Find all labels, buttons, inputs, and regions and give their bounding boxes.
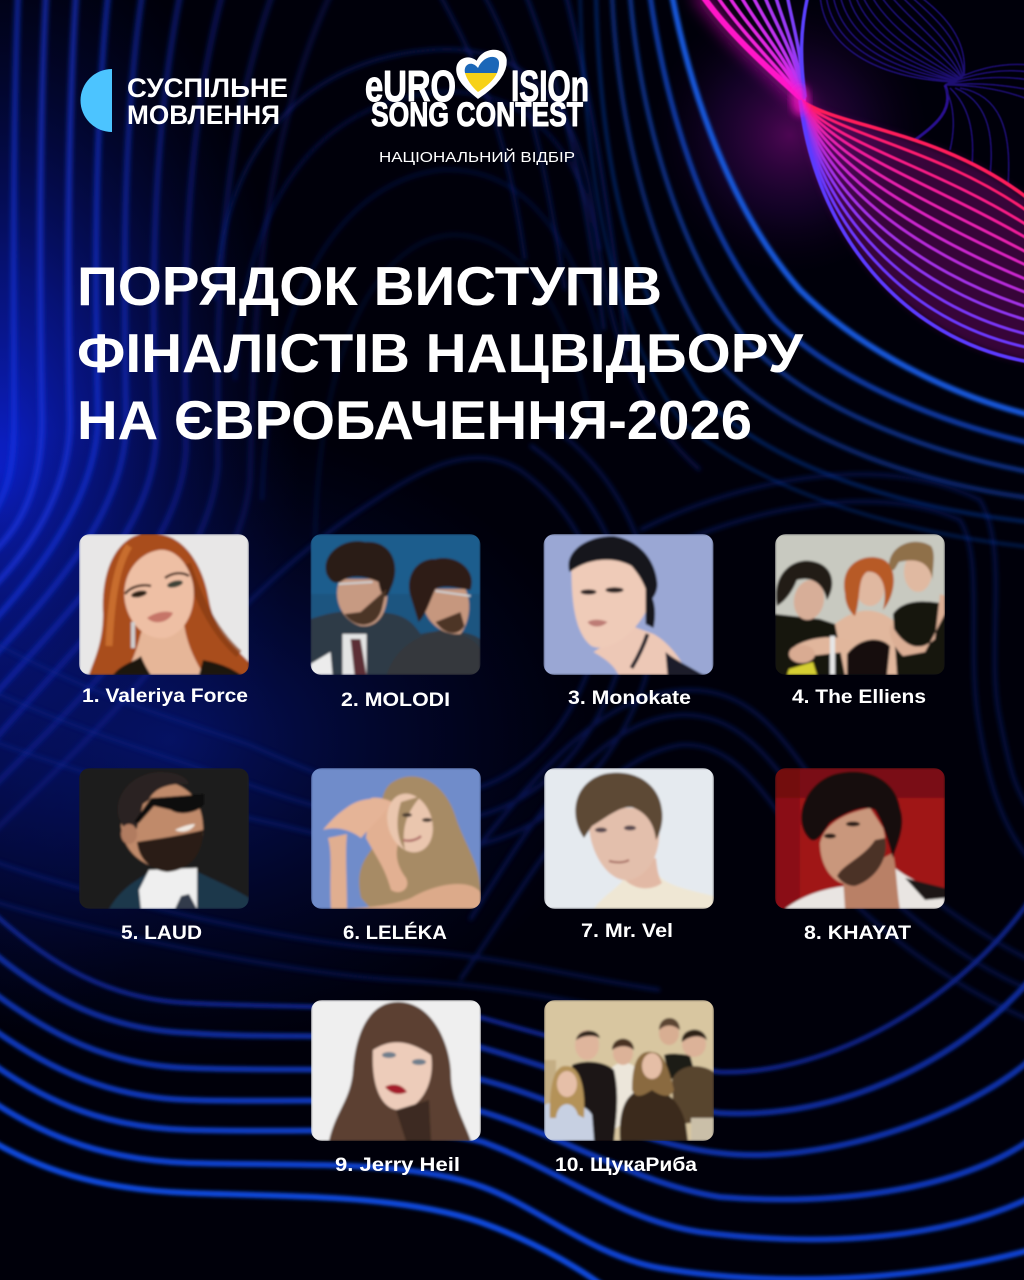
photo 2: MOLODI	[310, 534, 480, 675]
photo 1: Valeriya Force	[79, 534, 249, 675]
label 3: 3. Monokate	[568, 688, 691, 709]
logo: Eurovision Song Contest	[365, 50, 589, 134]
logo: Eurovision Song Contest: ISIOn	[511, 62, 589, 111]
ribbon interior glow	[800, 100, 1024, 362]
central arches	[215, 0, 700, 540]
photo 10: ЩукаРиба	[544, 1000, 714, 1141]
label 9: 9. Jerry Heil	[335, 1155, 460, 1176]
title: ПОРЯДОК ВИСТУПІВ	[77, 255, 662, 317]
Suspilne wordmark: СУСПІЛЬНЕ	[127, 73, 288, 103]
title: НА ЄВРОБАЧЕННЯ-2026	[77, 389, 752, 451]
logo: Eurovision Song Contest: eURO	[365, 62, 456, 111]
label 6: 6. LELÉKA	[343, 922, 447, 944]
faint central contour lines	[0, 425, 1024, 1020]
icon: Ukrainian heart	[457, 50, 506, 98]
label 1: 1. Valeriya Force	[82, 686, 248, 707]
label 2: 2. MOLODI	[341, 690, 450, 711]
Suspilne wordmark	[127, 73, 288, 130]
label 7: 7. Mr. Vel	[581, 921, 673, 942]
pink fan upper	[700, 0, 808, 105]
photo 7: Mr. Vel	[544, 768, 714, 909]
label 5: 5. LAUD	[121, 923, 202, 944]
photo 9: Jerry Heil	[311, 1000, 481, 1141]
lower blue wave lines	[0, 900, 1024, 1280]
photo 6: LELÉKA	[311, 768, 481, 909]
Suspilne wordmark: МОВЛЕННЯ	[127, 100, 280, 130]
right blue sweeping curves	[580, 0, 1024, 547]
logo: Suspilne	[81, 69, 288, 132]
back purple ribbon	[820, 0, 1024, 185]
photo 3: Monokate	[544, 534, 714, 675]
title	[77, 255, 804, 451]
subtitle: national selection: НАЦІОНАЛЬНИЙ ВІДБІР	[379, 148, 575, 166]
label 10: 10. ЩукаРиба	[555, 1155, 697, 1176]
left vertical wave lines	[0, 0, 330, 835]
photo 8: KHAYAT	[775, 768, 945, 909]
pink fan lower ribbon	[800, 100, 1024, 362]
photo 5: LAUD	[79, 768, 249, 909]
logo: Eurovision Song Contest: SONG CONTEST	[371, 96, 583, 134]
label 8: 8. KHAYAT	[804, 923, 911, 944]
icon: half circle	[81, 69, 112, 132]
label 4: 4. The Elliens	[792, 687, 926, 708]
photo 4: The Elliens	[775, 534, 945, 675]
title: ФІНАЛІСТІВ НАЦВІДБОРУ	[77, 322, 804, 384]
